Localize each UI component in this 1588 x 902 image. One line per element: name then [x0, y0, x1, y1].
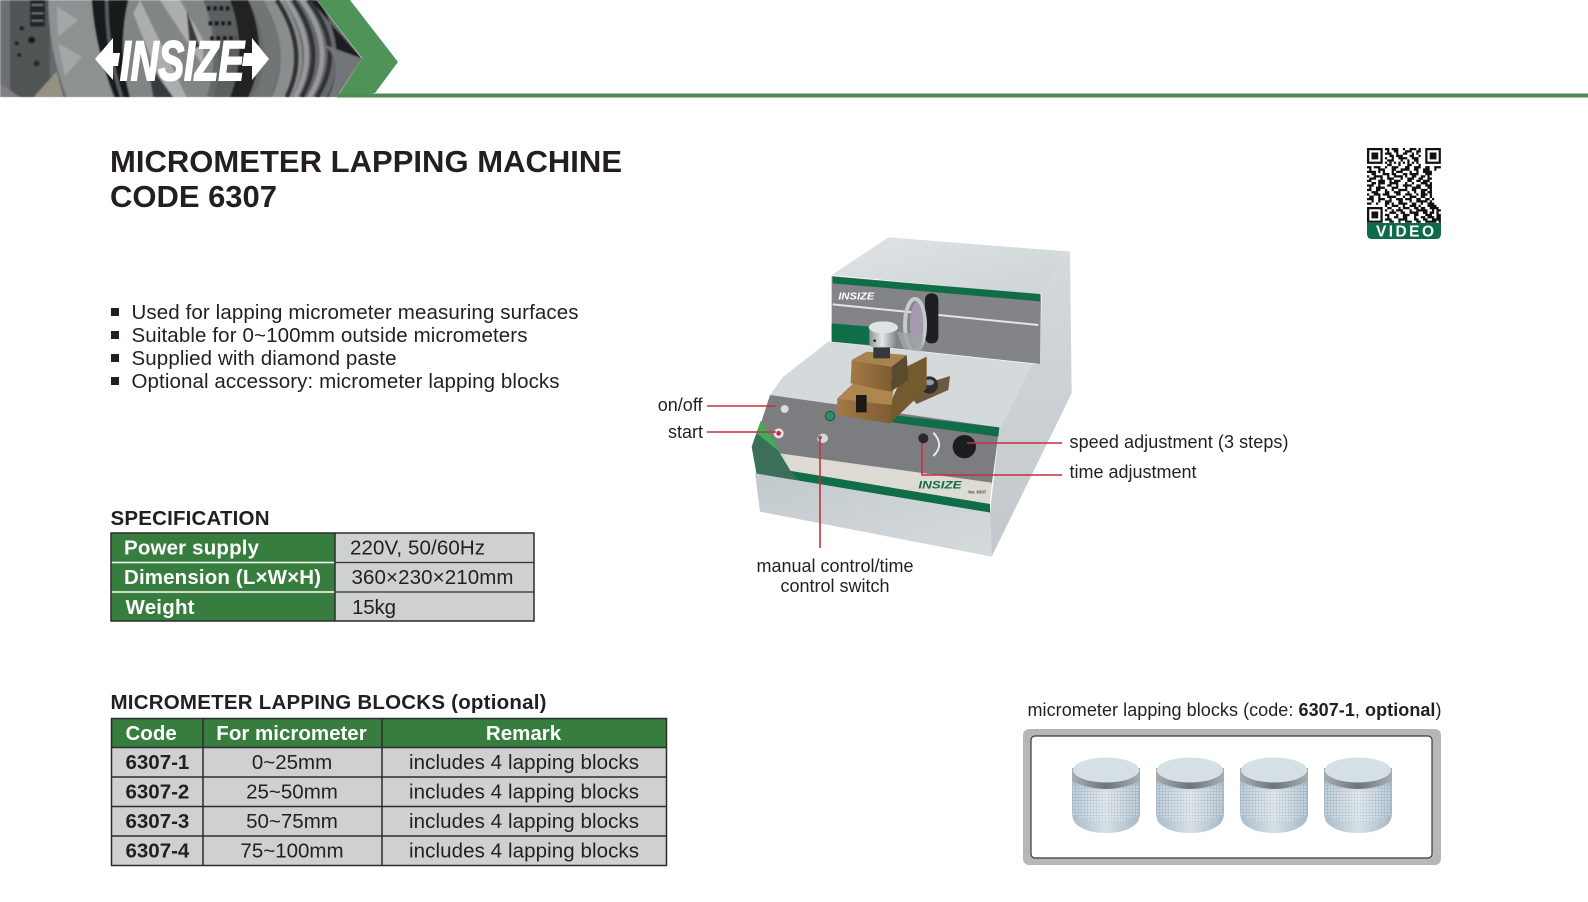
banner photo: machine gears — [0, 0, 367, 97]
specification table: Dimension (L×W×H) — [124, 566, 321, 589]
callout manual control — [756, 437, 914, 596]
callout start — [668, 422, 776, 442]
specification table: 15kg — [352, 596, 396, 619]
specification table: Weight — [126, 596, 195, 619]
block 3 — [1240, 758, 1308, 833]
machine illustration — [752, 237, 1072, 557]
block 2 — [1156, 758, 1224, 833]
callout manual control: manual control/time — [756, 556, 914, 576]
front control panel — [753, 395, 999, 485]
green chevron — [317, 0, 398, 98]
pilot lamp — [825, 411, 835, 421]
QR code with video tag: VIDEO — [1376, 224, 1434, 240]
machine illustration: No. 6307 — [968, 489, 987, 494]
INSIZE logo: INSIZE — [120, 29, 245, 92]
lapping blocks photo panel — [1023, 729, 1441, 865]
lower green stripe — [789, 471, 990, 513]
specification table: 360×230×210mm — [352, 566, 514, 589]
lapping blocks table: includes 4 lapping blocks — [409, 780, 639, 804]
lapping blocks table: 6307-3 — [126, 810, 189, 833]
lapping blocks table: 25~50mm — [246, 780, 338, 804]
lapping blocks heading: MICROMETER LAPPING BLOCKS (optional) — [110, 691, 546, 714]
speed knob — [953, 435, 976, 458]
start button — [774, 428, 784, 438]
front logo: INSIZE — [918, 479, 962, 491]
specification table: Power supply — [124, 536, 260, 560]
title: CODE 6307 — [110, 179, 277, 214]
specification table: 220V, 50/60Hz — [350, 536, 485, 560]
callout on/off: on/off — [658, 395, 703, 415]
machine callouts — [658, 395, 1288, 596]
slot and dial gauge — [905, 293, 938, 351]
upper front panel — [832, 276, 1041, 364]
lapping blocks table: 6307-2 — [126, 780, 189, 804]
QR pattern — [1367, 148, 1443, 223]
VIDEO tag — [1367, 223, 1441, 239]
callout time adjustment — [922, 443, 1197, 482]
callout manual control: control switch — [780, 576, 890, 596]
right side — [990, 252, 1072, 557]
callout speed adjustment: speed adjustment (3 steps) — [1070, 432, 1288, 452]
header banner — [0, 0, 1588, 98]
lapping blocks table: For micrometer — [216, 722, 367, 745]
callout on/off — [658, 395, 776, 415]
callout start: start — [668, 422, 703, 442]
bronze block — [851, 352, 908, 392]
manual switch — [817, 434, 828, 443]
lapping blocks table: 6307-1 — [126, 751, 189, 774]
lapping blocks table: includes 4 lapping blocks — [409, 810, 639, 833]
bullet 4: Optional accessory: micrometer lapping blocks — [132, 370, 560, 393]
lapping blocks table: 6307-4 — [126, 840, 190, 862]
specification heading: SPECIFICATION — [110, 507, 270, 530]
callout time adjustment: time adjustment — [1070, 462, 1197, 482]
bronze clamp base — [837, 357, 927, 423]
pale front band — [780, 453, 992, 505]
time knob — [918, 433, 939, 456]
lapping blocks table: 50~75mm — [246, 810, 338, 833]
deck — [770, 342, 1033, 427]
lower body — [755, 473, 992, 557]
block 1 — [1072, 758, 1140, 833]
bullet 3: Supplied with diamond paste — [132, 347, 396, 370]
feature list — [111, 301, 578, 393]
lapping blocks table: includes 4 lapping blocks — [409, 751, 639, 774]
specification table — [111, 533, 534, 621]
switch on/off — [781, 405, 789, 413]
steel knob — [869, 321, 898, 358]
upper top face — [832, 237, 1070, 295]
title: MICROMETER LAPPING MACHINE — [110, 144, 622, 179]
QR code with video tag — [1367, 148, 1443, 240]
lapping blocks table — [111, 718, 667, 866]
lapping blocks table: Code — [126, 722, 177, 745]
title — [110, 144, 622, 214]
clamp plate and screw — [905, 376, 950, 404]
green rule — [337, 94, 1588, 98]
lapping blocks table: 0~25mm — [252, 751, 332, 774]
bullet 2: Suitable for 0~100mm outside micrometers — [132, 324, 528, 347]
block 4 — [1324, 758, 1392, 833]
lapping blocks caption: micrometer lapping blocks (code: 6307-1, optional) — [1028, 700, 1442, 720]
lapping blocks table: Remark — [486, 722, 562, 745]
lapping blocks table: 75~100mm — [240, 840, 344, 862]
small panel logo: INSIZE — [838, 291, 875, 302]
bullet 1: Used for lapping micrometer measuring surfaces — [132, 301, 578, 324]
green corner — [752, 421, 798, 481]
lapping blocks table: includes 4 lapping blocks — [409, 840, 639, 862]
